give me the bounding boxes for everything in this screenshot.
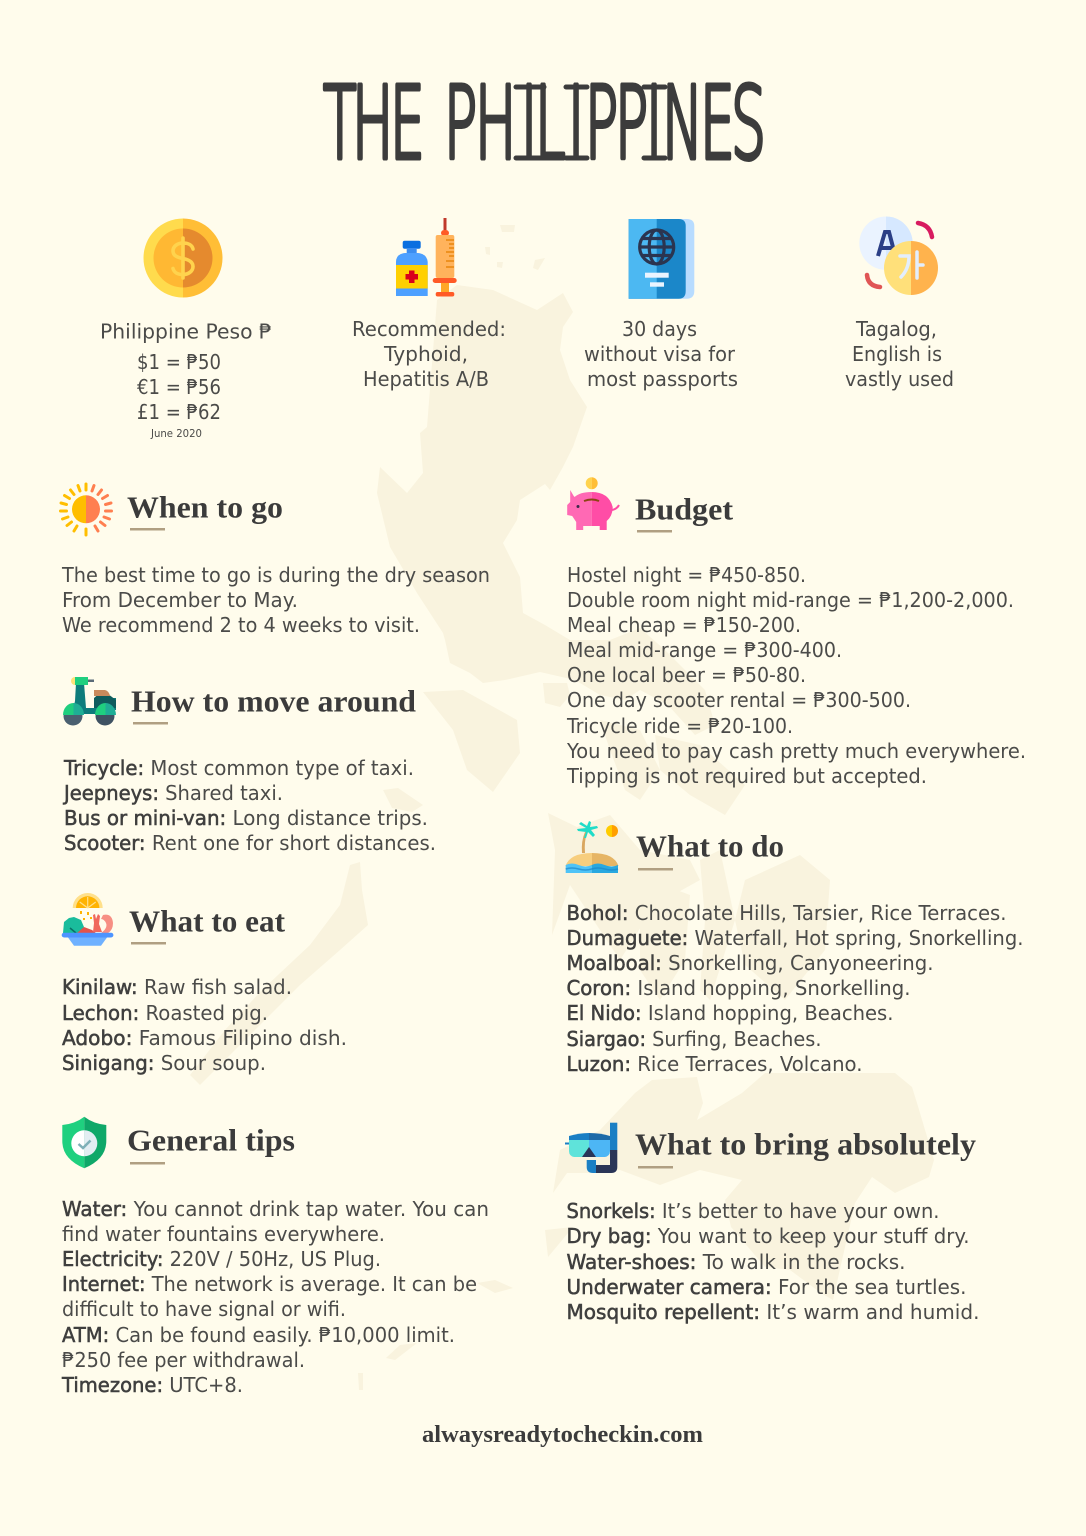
text: what to eat — [62, 975, 347, 1075]
currency text: $1 = ₱50 — [137, 350, 221, 374]
text: general tips: ₱250 fee per withdrawal. — [62, 1348, 305, 1372]
text: what to bring absolutely: Dry bag: You want to keep your stuff dry. — [566, 1224, 970, 1248]
title: THE PHILIPPINES — [323, 66, 766, 183]
visa text — [584, 317, 738, 391]
visa text: most passports — [587, 367, 738, 391]
icon: coin — [144, 218, 223, 298]
text: general tips: Electricity: 220V / 50Hz, US Plug. — [62, 1247, 381, 1271]
panel: language — [845, 216, 954, 391]
panel: budget — [566, 477, 1026, 788]
icon: snorkel mask — [565, 1123, 617, 1173]
text: what to eat: Sinigang: Sour soup. — [62, 1051, 266, 1075]
text: budget: Meal mid-range = ₱300-400. — [567, 638, 842, 662]
text: what to eat: Kinilaw: Raw fish salad. — [62, 975, 292, 999]
vaccines text: Hepatitis A/B — [363, 367, 489, 391]
text: when to go: We recommend 2 to 4 weeks to visit. — [62, 613, 420, 637]
text: general tips: Internet: The network is average. It can be — [62, 1272, 477, 1296]
text: budget — [566, 563, 1026, 788]
text: budget: Tipping is not required but accepted. — [566, 764, 927, 788]
text: general tips: find water fountains everywhere. — [62, 1222, 385, 1246]
icon: piggy bank — [567, 477, 619, 530]
text: what to do: Siargao: Surfing, Beaches. — [566, 1027, 822, 1051]
text: what to eat: Lechon: Roasted pig. — [62, 1001, 268, 1025]
icon: sun — [60, 484, 112, 535]
text: budget: You need to pay cash pretty much everywhere. — [566, 739, 1026, 763]
text: what to do: Moalboal: Snorkelling, Canyoneering. — [566, 951, 934, 975]
currency text: Philippine Peso ₱ — [100, 320, 272, 344]
text: what to do: El Nido: Island hopping, Beaches. — [566, 1001, 894, 1025]
text: budget: One day scooter rental = ₱300-500. — [567, 688, 911, 712]
text: how to move around: Tricycle: Most common type of taxi. — [63, 756, 414, 780]
language text: English is — [852, 342, 942, 366]
heading: how to move around: How to move around — [131, 683, 416, 718]
footer website: alwaysreadytocheckin.com — [422, 1422, 703, 1448]
text: what to bring absolutely — [566, 1199, 980, 1324]
panel: what to do — [566, 821, 1024, 1076]
text: what to do: Dumaguete: Waterfall, Hot spring, Snorkelling. — [566, 926, 1024, 950]
text: general tips: Timezone: UTC+8. — [61, 1373, 243, 1397]
icon: shield — [62, 1117, 106, 1168]
heading: when to go: When to go — [127, 489, 283, 524]
text: how to move around — [62, 756, 436, 855]
heading: budget: Budget — [635, 491, 734, 526]
text: budget: Double room night mid-range = ₱1,200-2,000. — [567, 588, 1014, 612]
text: how to move around: Bus or mini-van: Long distance trips. — [64, 806, 428, 830]
icon: vial and syringe — [396, 218, 457, 296]
text: when to go: The best time to go is during the dry season — [61, 563, 490, 587]
heading: what to eat: What to eat — [129, 903, 286, 938]
text: budget: One local beer = ₱50-80. — [567, 663, 806, 687]
text: what to bring absolutely: Underwater camera: For the sea turtles. — [566, 1275, 967, 1299]
panel: vaccines — [352, 218, 506, 391]
language text: vastly used — [845, 367, 954, 391]
text: what to eat: Adobo: Famous Filipino dish. — [62, 1026, 347, 1050]
currency text: €1 = ₱56 — [137, 375, 221, 399]
heading: what to do: What to do — [636, 828, 784, 863]
icon: passport — [629, 219, 694, 299]
text: what to bring absolutely: Mosquito repellent: It’s warm and humid. — [566, 1300, 980, 1324]
panel: what to bring absolutely — [565, 1123, 980, 1324]
heading: what to bring absolutely: What to bring absolutely — [635, 1126, 977, 1161]
panel: what to eat — [62, 893, 347, 1075]
icon: food bowl — [62, 893, 113, 946]
text: budget: Meal cheap = ₱150-200. — [567, 613, 801, 637]
text: budget: Tricycle ride = ₱20-100. — [566, 714, 793, 738]
icon: scooter — [63, 677, 116, 726]
text: general tips: difficult to have signal or wifi. — [62, 1297, 346, 1321]
heading: general tips: General tips — [127, 1122, 295, 1157]
currency text: June 2020 — [150, 428, 202, 440]
icon: translation bubbles — [859, 216, 938, 295]
panel: when to go — [60, 484, 490, 637]
text: what to do: Coron: Island hopping, Snorkelling. — [566, 976, 910, 1000]
text: general tips — [61, 1197, 489, 1397]
language text: Tagalog, — [855, 317, 937, 341]
panel: visa — [584, 219, 738, 391]
vaccines text — [352, 317, 506, 391]
panel: currency — [100, 218, 272, 440]
text: general tips: ATM: Can be found easily. ₱10,000 limit. — [62, 1323, 455, 1347]
visa text: 30 days — [622, 317, 697, 341]
text: what to do: Luzon: Rice Terraces, Volcano. — [566, 1052, 862, 1076]
panel: general tips — [61, 1117, 489, 1397]
icon: island — [566, 821, 618, 873]
language text — [845, 317, 954, 391]
vaccines text: Recommended: — [352, 317, 506, 341]
visa text: without visa for — [584, 342, 736, 366]
text: what to do — [566, 901, 1024, 1076]
text: budget: Hostel night = ₱450-850. — [567, 563, 806, 587]
text: how to move around: Scooter: Rent one for short distances. — [64, 831, 436, 855]
currency text — [100, 320, 272, 440]
background map of the Philippines — [190, 225, 934, 1390]
text: what to bring absolutely: Snorkels: It’s better to have your own. — [566, 1199, 940, 1223]
text: when to go — [61, 563, 490, 637]
text: general tips: Water: You cannot drink tap water. You can — [62, 1197, 489, 1221]
text: what to bring absolutely: Water-shoes: To walk in the rocks. — [566, 1250, 906, 1274]
text: how to move around: Jeepneys: Shared taxi. — [62, 781, 283, 805]
vaccines text: Typhoid, — [383, 342, 468, 366]
text: when to go: From December to May. — [62, 588, 298, 612]
text: what to do: Bohol: Chocolate Hills, Tarsier, Rice Terraces. — [566, 901, 1006, 925]
panel: how to move around — [62, 677, 436, 855]
currency text: £1 = ₱62 — [137, 400, 221, 424]
